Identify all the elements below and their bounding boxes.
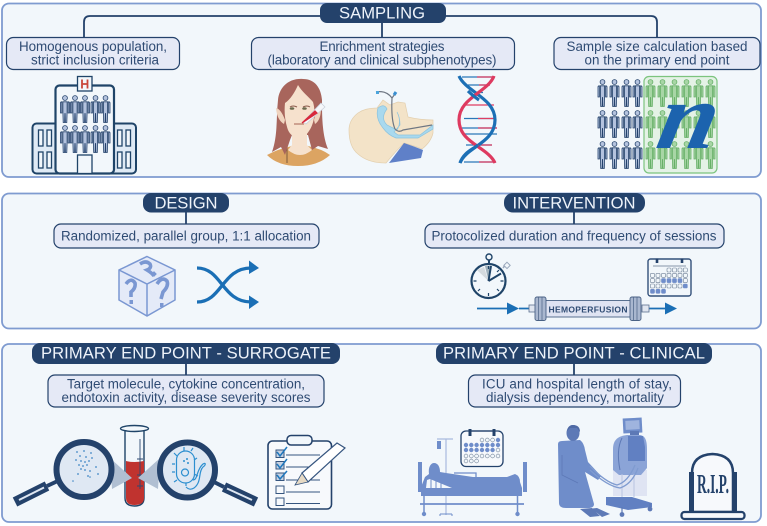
text box: surrogate measures: Target molecule, cytokine concentration, <box>67 376 305 392</box>
icon: sample of people with letter n: n <box>650 64 730 168</box>
icon: RIP gravestone: R.I.P. <box>697 469 729 499</box>
icon: question mark cube <box>119 256 175 316</box>
text box: sample size: Sample size calculation based <box>566 39 748 54</box>
text box: surrogate measures <box>48 375 324 407</box>
heading: sampling <box>320 3 446 23</box>
icon: session calendar <box>648 258 691 296</box>
icon: seated patient at dialysis machine <box>558 418 652 517</box>
text box: enrichment strategies: (laboratory and clinical subphenotypes) <box>268 52 496 68</box>
text box: clinical measures <box>468 375 680 407</box>
panel: primary end points <box>2 343 761 522</box>
text box: randomized: Randomized, parallel group, 1:1 allocation <box>61 228 311 244</box>
clinical connector <box>573 360 575 375</box>
text box: homogenous population <box>6 38 180 70</box>
icon: hemoperfusion cartridge with flow arrows: HEMOPERFUSION <box>548 304 628 314</box>
text box: protocolized <box>425 224 724 248</box>
intervention connector <box>573 210 575 224</box>
icon: hospital stay calendar <box>461 429 503 466</box>
panel: sampling <box>2 3 761 177</box>
icon: hospital with patients <box>32 76 136 174</box>
text box: homogenous population: Homogenous population, <box>19 39 167 54</box>
text box: clinical measures: dialysis dependency, mortality <box>486 390 664 405</box>
icon: RIP gravestone <box>682 454 744 519</box>
text box: sample size: on the primary end point <box>584 52 730 68</box>
heading: surrogate end point: PRIMARY END POINT - SURROGATE <box>41 344 331 362</box>
icon: patient in hospital bed with IV <box>418 439 527 516</box>
text box: surrogate measures: endotoxin activity, disease severity scores <box>62 390 311 405</box>
panel: design and intervention <box>2 193 761 328</box>
icon: intubated airway <box>349 92 433 163</box>
icon: test tube and magnifiers <box>15 426 256 506</box>
design connector <box>185 210 187 224</box>
heading: intervention: INTERVENTION <box>512 194 636 212</box>
icon: DNA helix <box>459 76 497 163</box>
icon: sample of people with letter n <box>598 64 730 173</box>
text box: protocolized: Protocolized duration and frequency of sessions <box>432 228 717 244</box>
heading: design: DESIGN <box>154 194 218 212</box>
icon: febrile woman with thermometer <box>267 79 330 166</box>
heading: clinical end point: PRIMARY END POINT - CLINICAL <box>443 344 705 362</box>
text box: randomized <box>54 224 319 248</box>
text box: enrichment strategies: Enrichment strategies <box>320 39 445 54</box>
icon: crossing randomization arrows <box>197 260 259 309</box>
text box: homogenous population: strict inclusion criteria <box>31 52 160 68</box>
icon: clipboard checklist with pencil <box>268 436 345 509</box>
sampling connector lines <box>84 16 657 37</box>
icon: hemoperfusion cartridge with flow arrows <box>477 297 677 320</box>
icon: stopwatch <box>472 254 510 298</box>
text box: enrichment strategies <box>252 38 514 70</box>
text box: clinical measures: ICU and hospital length of stay, <box>482 376 672 392</box>
text box: sample size <box>554 38 760 70</box>
heading: sampling: SAMPLING <box>339 4 425 22</box>
surrogate connector <box>185 360 187 375</box>
